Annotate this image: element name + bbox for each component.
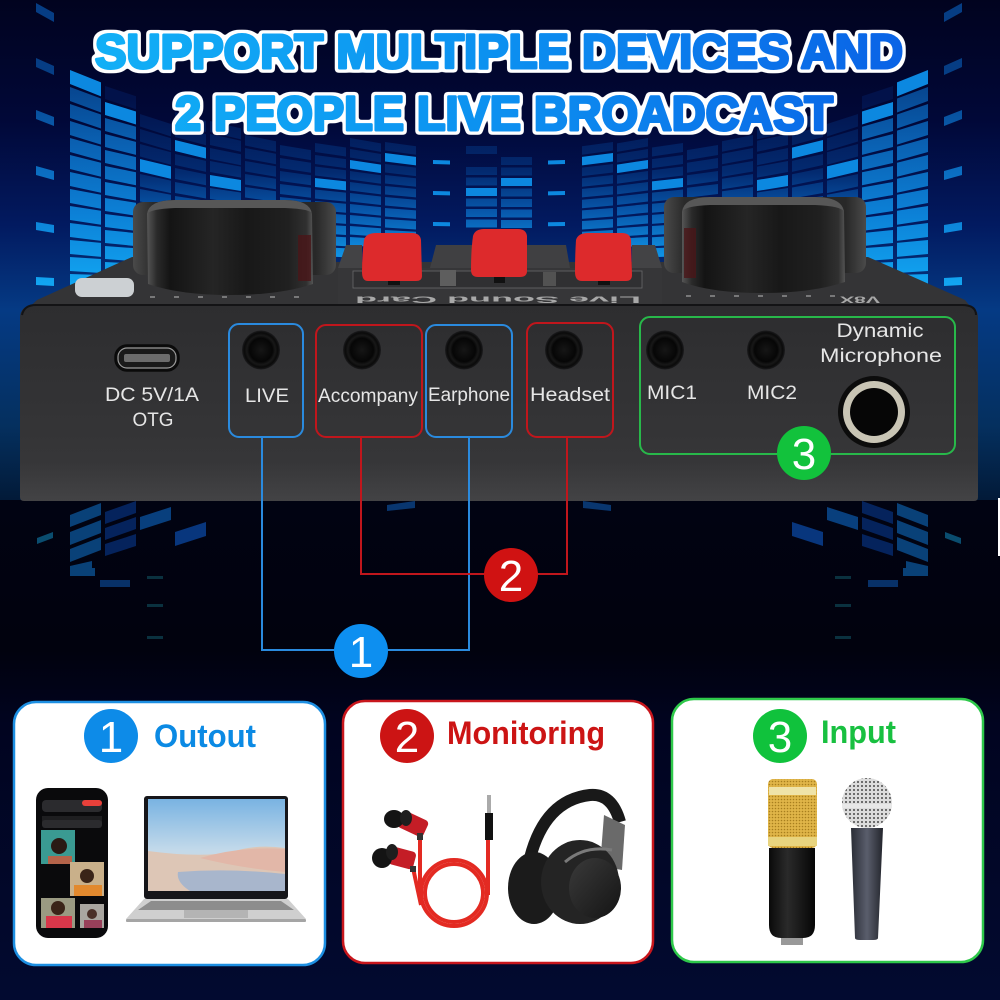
- sound card device: [20, 197, 978, 501]
- port labels: [105, 321, 942, 431]
- icon: condenser microphone: [768, 779, 817, 945]
- panel: input: [672, 699, 983, 962]
- heading: Monitoring: [380, 709, 605, 763]
- port labels: MIC2: [747, 383, 797, 404]
- heading: Outout: [84, 709, 256, 763]
- icon: laptop: [126, 796, 306, 922]
- badge 2: [484, 548, 538, 602]
- heading: Input: [753, 709, 896, 763]
- icon: over-ear headphones: [508, 795, 625, 924]
- panel: monitoring: [343, 701, 653, 963]
- left big knob: [147, 200, 313, 297]
- heading: Input: 3: [768, 713, 792, 762]
- device top surface: [20, 245, 978, 316]
- device top surface: Live Sound Card: [355, 294, 641, 304]
- port labels: OTG: [132, 410, 174, 431]
- heading: Monitoring: 2: [395, 713, 419, 762]
- port labels: Dynamic: [836, 321, 924, 342]
- panel: output: [14, 702, 325, 965]
- badge 1: [334, 624, 388, 678]
- heading: Monitoring: Monitoring: [447, 715, 605, 751]
- title: SUPPORT MULTIPLE DEVICES AND: [95, 26, 903, 79]
- output connector: LIVE and Earphone to 1: [229, 324, 512, 650]
- icon: handheld microphone: [842, 778, 892, 940]
- badge 1: 1: [349, 628, 373, 677]
- device front panel: [20, 305, 978, 501]
- icon: smartphone: [36, 788, 108, 938]
- icon: red earphones: [372, 795, 493, 926]
- 6.35mm microphone jack: [838, 376, 910, 448]
- port labels: Microphone: [820, 346, 942, 367]
- title: [95, 26, 903, 141]
- port labels: Accompany: [318, 386, 418, 407]
- input group outline: [640, 317, 955, 454]
- usb-c port: [115, 345, 179, 371]
- heading: Input: Input: [821, 714, 896, 750]
- red faders: [362, 229, 632, 285]
- port labels: DC 5V/1A: [105, 385, 199, 406]
- badge 2: 2: [499, 552, 523, 601]
- monitoring connector: Accompany and Headset to 2: [316, 323, 613, 574]
- heading: Outout: 1: [99, 713, 123, 762]
- device top surface: V8X: [840, 294, 880, 304]
- badge 3: [777, 426, 831, 480]
- rear knobs: [133, 197, 866, 275]
- right big knob: [682, 197, 846, 296]
- audio jacks: [242, 330, 785, 370]
- port labels: Headset: [530, 385, 611, 406]
- port labels: MIC1: [647, 383, 697, 404]
- power button: [75, 278, 134, 297]
- title: 2 PEOPLE LIVE BROADCAST: [175, 88, 833, 141]
- badge 3: 3: [792, 430, 816, 479]
- heading: Outout: Outout: [154, 718, 256, 754]
- port labels: Earphone: [428, 385, 510, 406]
- port labels: LIVE: [245, 386, 289, 407]
